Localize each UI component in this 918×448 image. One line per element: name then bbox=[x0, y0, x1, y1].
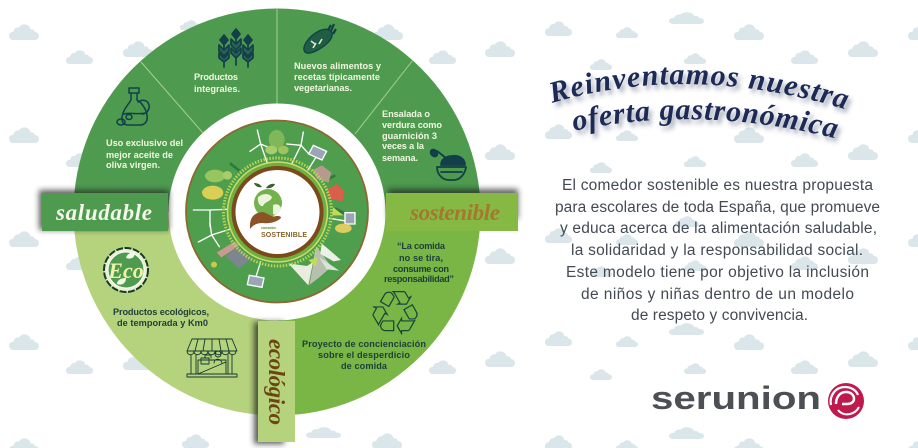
title: Reinventamos nuestra bbox=[550, 68, 854, 115]
body paragraph: para escolares de toda España, que promueve bbox=[555, 199, 880, 216]
text: nuevos alimentos bbox=[294, 61, 382, 93]
title bbox=[550, 68, 854, 144]
logo: comedor sostenible: SOSTENIBLE bbox=[261, 232, 307, 239]
text: ensalada: verdura como bbox=[382, 120, 442, 130]
icon: carrot bbox=[304, 24, 336, 53]
body paragraph: de respeto y convivencia. bbox=[631, 307, 808, 324]
logo: serunion bbox=[651, 380, 864, 419]
banner: ecológico: ecológico bbox=[264, 339, 289, 425]
title: oferta gastronómica bbox=[573, 102, 843, 144]
houses bbox=[313, 165, 352, 233]
icon: rose bbox=[828, 383, 864, 419]
circular diagram bbox=[39, 8, 518, 444]
text: productos integrales: integrales. bbox=[194, 84, 240, 94]
icon: wheat bbox=[219, 29, 253, 67]
body paragraph: de niños y niñas dentro de un modelo bbox=[581, 286, 854, 303]
icon: eco badge: Eco bbox=[107, 258, 144, 283]
mountains bbox=[288, 243, 341, 285]
text: ensalada bbox=[382, 109, 442, 163]
icon: salad bowl bbox=[429, 148, 466, 180]
text: productos ecológicos: Productos ecológicos, bbox=[113, 307, 209, 317]
illustration ring bbox=[193, 130, 355, 287]
banner: saludable bbox=[39, 190, 169, 231]
body paragraph: El comedor sostenible es nuestra propuesta bbox=[562, 177, 873, 194]
text: uso exclusivo bbox=[106, 138, 183, 170]
body paragraph bbox=[555, 177, 880, 324]
text: productos integrales bbox=[194, 72, 240, 94]
factory bbox=[211, 241, 251, 269]
banner: sostenible bbox=[386, 189, 518, 231]
text: proyecto de concienciación: Proyecto de concienciación bbox=[302, 339, 426, 349]
text: ensalada: semana. bbox=[382, 153, 418, 163]
center disc bbox=[186, 120, 368, 302]
segment: sostenible (bottom right) bbox=[277, 212, 480, 416]
logo: serunion: serunion bbox=[651, 380, 821, 416]
yellow tick ring bbox=[224, 158, 332, 266]
white ring bbox=[168, 104, 386, 320]
banner: ecológico bbox=[254, 321, 295, 444]
logo: comedor sostenible bbox=[250, 183, 307, 239]
text: ensalada: Ensalada o bbox=[382, 109, 430, 119]
text: nuevos alimentos: recetas típicamente bbox=[294, 72, 380, 82]
banner: sostenible: sostenible bbox=[409, 200, 500, 225]
text: la comida no se tira: “La comida bbox=[397, 241, 446, 251]
text: la comida no se tira bbox=[384, 241, 454, 284]
body paragraph: Este modelo tiene por objetivo la inclusión bbox=[566, 264, 869, 281]
icon: eco badge bbox=[104, 248, 148, 292]
icon: market stall bbox=[187, 339, 237, 377]
text: ensalada: veces a la bbox=[382, 141, 425, 151]
text: proyecto de concienciación: sobre el desperdicio bbox=[318, 350, 410, 360]
text: productos ecológicos bbox=[113, 307, 209, 328]
body paragraph: y educa acerca de la alimentación saludable, bbox=[560, 220, 877, 237]
segment: saludable (top half) bbox=[74, 8, 480, 212]
text: la comida no se tira: no se tira, bbox=[399, 253, 443, 263]
text: la comida no se tira: consume con bbox=[393, 264, 449, 274]
text: proyecto de concienciación: de comida bbox=[341, 361, 388, 371]
text: uso exclusivo: oliva virgen. bbox=[106, 160, 160, 170]
text: productos ecológicos: de temporada y Km0 bbox=[117, 318, 208, 328]
text: proyecto de concienciación bbox=[302, 339, 426, 371]
text: uso exclusivo: mejor aceite de bbox=[106, 150, 173, 160]
text: la comida no se tira: responsabilidad” bbox=[384, 274, 454, 284]
text: productos integrales: Productos bbox=[194, 72, 238, 82]
icon: recycling: ♲ bbox=[367, 277, 423, 350]
banner: saludable: saludable bbox=[55, 200, 152, 225]
text: nuevos alimentos: Nuevos alimentos y bbox=[294, 61, 382, 71]
text: uso exclusivo: Uso exclusivo del bbox=[106, 138, 183, 148]
text: nuevos alimentos: vegetarianas. bbox=[294, 83, 352, 93]
text: ensalada: guarnición 3 bbox=[382, 131, 437, 141]
segment: ecológico (bottom left) bbox=[74, 212, 277, 416]
body paragraph: la solidaridad y la responsabilidad social. bbox=[571, 242, 863, 259]
icon: oil bottle bbox=[117, 88, 149, 125]
solar panels bbox=[247, 145, 355, 287]
trees bbox=[202, 130, 344, 213]
logo: comedor sostenible: comedor bbox=[261, 225, 276, 230]
